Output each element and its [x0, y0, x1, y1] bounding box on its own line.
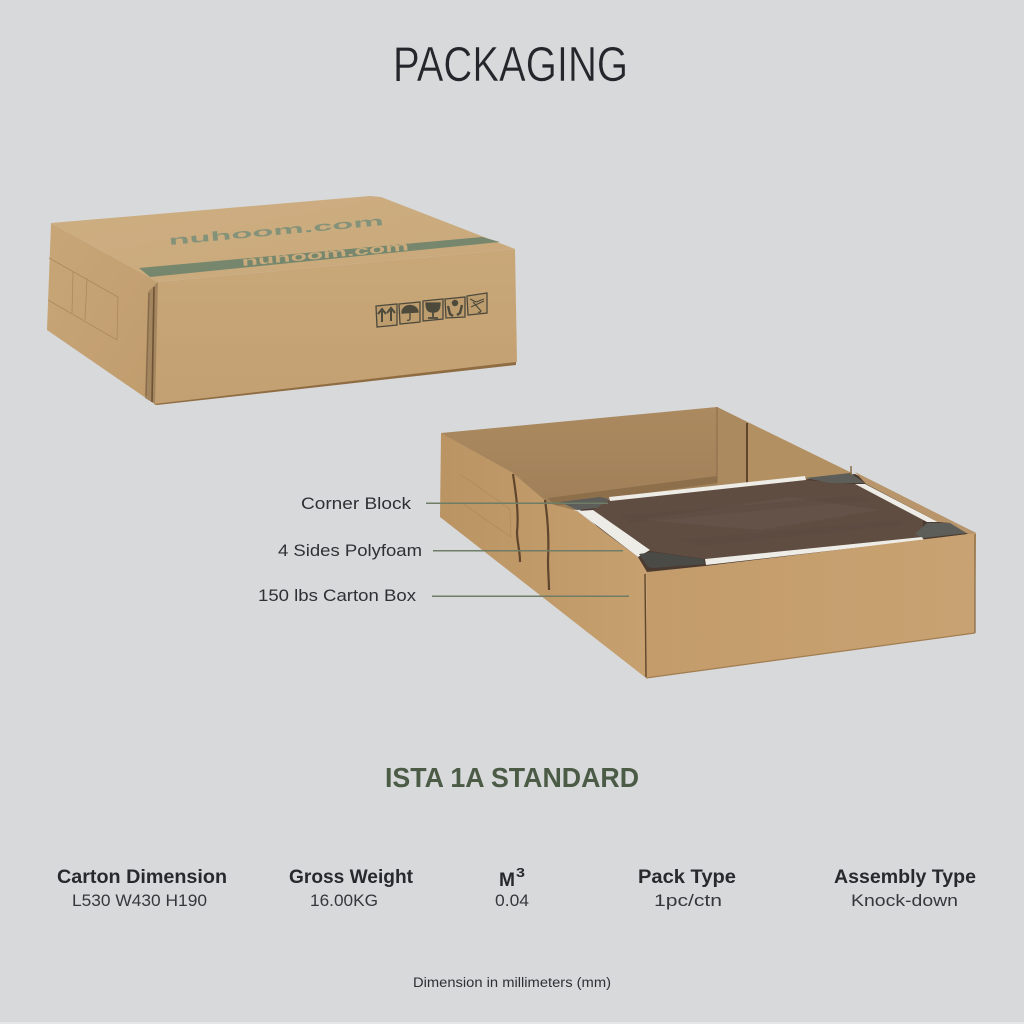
brand on tape: nuhoom.com	[241, 239, 410, 269]
spec: cubic metres: 3	[516, 865, 525, 880]
icon: this way up	[376, 304, 397, 327]
box side label outline	[48, 258, 118, 340]
icon: handle with care	[445, 297, 465, 318]
callout: polyfoam: 4 Sides Polyfoam	[278, 541, 422, 560]
interior right wall	[717, 407, 852, 490]
spec: pack type	[638, 867, 736, 910]
brand on box top: nuhoom.com	[168, 213, 384, 248]
icon: keep dry	[399, 302, 420, 324]
spec: carton dimension: Carton Dimension	[57, 867, 227, 888]
spec: carton dimension: L530 W430 H190	[72, 891, 207, 910]
open carton box	[440, 407, 976, 678]
icon: fragile	[423, 299, 443, 321]
spec: gross weight: 16.00KG	[310, 891, 378, 910]
interior back wall	[441, 407, 717, 512]
packed board	[593, 480, 923, 559]
box left side	[47, 223, 158, 405]
icons: handling marks	[376, 293, 487, 327]
spec: cubic metres	[495, 865, 529, 910]
heading: ista standard: ISTA 1A STANDARD	[385, 762, 639, 793]
spec: cubic metres: 0.04	[495, 891, 529, 910]
left panel creases	[513, 474, 549, 590]
spec: carton dimension	[57, 867, 227, 910]
footnote: Dimension in millimeters (mm)	[413, 975, 611, 990]
front corner block	[639, 552, 705, 568]
spec: pack type: 1pc/ctn	[654, 891, 722, 910]
carton floor	[575, 474, 976, 575]
title: PACKAGING	[393, 38, 628, 92]
front panel	[646, 533, 976, 678]
box tape	[139, 237, 500, 277]
spec: gross weight	[289, 867, 414, 910]
box corner seam	[145, 282, 158, 404]
closed carton box	[47, 196, 517, 405]
right flap edge	[855, 472, 976, 534]
left panel label outline	[460, 474, 511, 537]
foam strips	[578, 476, 938, 565]
icon: do not cut	[467, 293, 487, 315]
spec: cubic metres: M	[499, 870, 515, 891]
box top face	[51, 196, 515, 282]
left side panel	[440, 433, 647, 678]
callout: corner block: Corner Block	[301, 494, 412, 513]
spec: assembly type: Knock-down	[851, 891, 958, 910]
box front face	[155, 249, 517, 405]
spec: gross weight: Gross Weight	[289, 867, 414, 888]
callout: carton box: 150 lbs Carton Box	[258, 586, 417, 605]
spec: pack type: Pack Type	[638, 867, 736, 888]
spec: assembly type: Assembly Type	[834, 867, 976, 888]
corner blocks	[560, 473, 968, 538]
spec: assembly type	[834, 867, 976, 910]
